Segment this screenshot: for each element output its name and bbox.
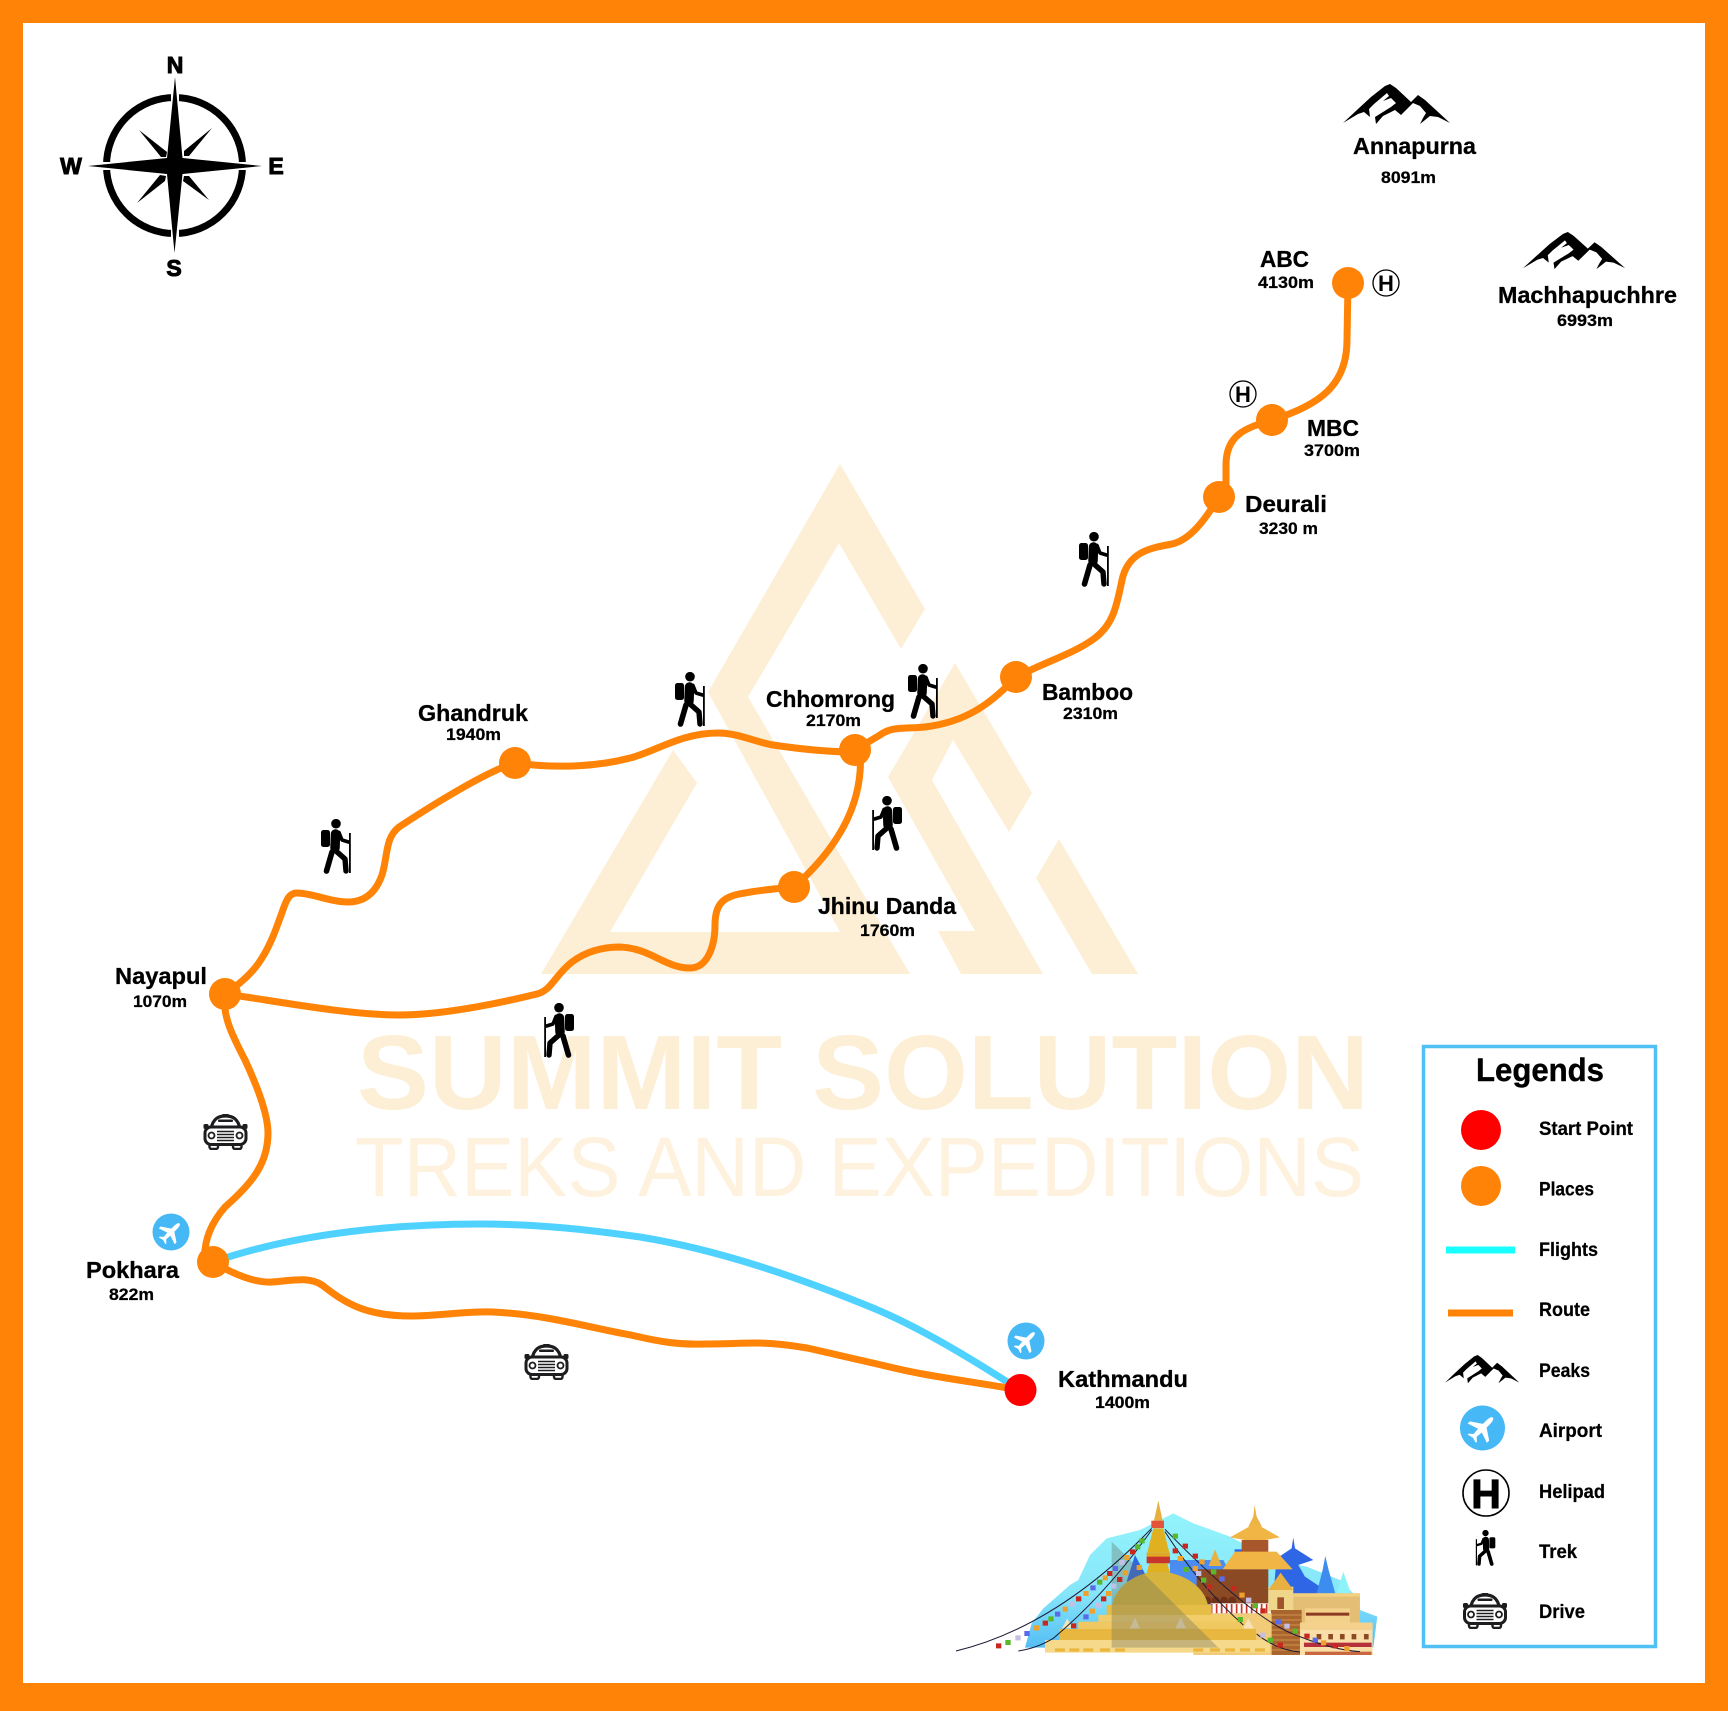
legend item: places: Places <box>1539 1178 1594 1200</box>
legend title: Legends <box>1476 1052 1604 1088</box>
peak: Machhapuchhre <box>1498 232 1677 330</box>
peak: Machhapuchhre: Machhapuchhre <box>1498 282 1677 308</box>
watermark logo and company name <box>355 464 1369 1214</box>
peak: Annapurna <box>1343 84 1476 187</box>
icon: helipad at ABC <box>1373 270 1399 296</box>
peak: Annapurna: 8091m <box>1381 169 1436 187</box>
icon: trekker near Deurali <box>1079 532 1109 586</box>
icon: trekker on lower route <box>544 1003 574 1057</box>
icon: trekker near Nayapul <box>321 819 351 873</box>
label: ABC: 4130m <box>1258 274 1314 292</box>
legend item: trek <box>1476 1530 1577 1565</box>
label: Jhinu Danda <box>818 893 956 940</box>
label: Bamboo: 2310m <box>1063 705 1118 723</box>
legend item: helipad <box>1463 1470 1605 1517</box>
label: MBC <box>1304 415 1360 460</box>
place nodes <box>197 267 1364 1278</box>
label: Ghandruk: Ghandruk <box>418 700 528 726</box>
icon: car Nayapul to Pokhara <box>204 1114 248 1149</box>
compass rose: W <box>60 153 82 179</box>
watermark logo and company name: SUMMIT SOLUTION <box>357 1014 1369 1132</box>
label: Pokhara: 822m <box>109 1286 154 1304</box>
legend item: peaks <box>1445 1355 1590 1383</box>
label: Chhomrong: 2170m <box>806 712 861 730</box>
legend item: drive <box>1463 1593 1585 1628</box>
panel: legend <box>1424 1046 1656 1646</box>
label: Chhomrong: Chhomrong <box>766 686 895 712</box>
compass rose: E <box>268 153 284 179</box>
legend item: start point <box>1461 1110 1633 1150</box>
label: Ghandruk <box>418 700 528 744</box>
compass rose <box>60 52 284 281</box>
start point: Kathmandu <box>1004 1374 1036 1406</box>
label: Kathmandu: Kathmandu <box>1058 1366 1188 1392</box>
legend item: route <box>1448 1299 1590 1321</box>
legend item: helipad: H <box>1471 1471 1501 1517</box>
icon: helipad at ABC: H <box>1378 271 1394 296</box>
legend item: airport <box>1460 1406 1602 1450</box>
label: Ghandruk: 1940m <box>446 726 501 744</box>
illustration: Kathmandu temples and stupa <box>956 1501 1377 1655</box>
label: Jhinu Danda: 1760m <box>860 922 915 940</box>
flight path Pokhara to Kathmandu <box>213 1224 1020 1390</box>
label: ABC <box>1258 246 1314 292</box>
icon: helipad at MBC: H <box>1235 382 1251 407</box>
label: MBC: MBC <box>1307 415 1359 441</box>
label: Nayapul: 1070m <box>133 993 187 1011</box>
legend item: peaks: Peaks <box>1539 1360 1590 1382</box>
watermark logo and company name: TREKS AND EXPEDITIONS <box>355 1120 1364 1214</box>
label: Jhinu Danda: Jhinu Danda <box>818 893 956 919</box>
compass rose: S <box>166 255 182 281</box>
label: MBC: 3700m <box>1304 442 1360 460</box>
icon: Pokhara airport <box>152 1214 190 1250</box>
label: Kathmandu <box>1058 1366 1188 1412</box>
legend item: trek: Trek <box>1539 1541 1577 1563</box>
peak: Machhapuchhre: 6993m <box>1557 312 1613 330</box>
label: Pokhara: Pokhara <box>86 1257 179 1283</box>
label: Nayapul: Nayapul <box>115 963 207 989</box>
legend item: start point: Start Point <box>1539 1118 1633 1140</box>
label: Chhomrong <box>766 686 895 730</box>
orange trek and drive routes <box>205 283 1348 1390</box>
legend item: places <box>1461 1166 1594 1206</box>
legend item: helipad: Helipad <box>1539 1481 1605 1503</box>
legend item: flights: Flights <box>1539 1239 1598 1261</box>
icon: trekker near Ghandruk <box>675 672 705 726</box>
icon: car Pokhara to Kathmandu <box>524 1344 568 1379</box>
legend item: route: Route <box>1539 1299 1590 1321</box>
label: Deurali: Deurali <box>1245 491 1327 517</box>
icon: trekker near Chhomrong <box>908 664 938 718</box>
compass rose: N <box>167 52 183 78</box>
legend item: drive: Drive <box>1539 1601 1585 1623</box>
legend item: airport: Airport <box>1539 1420 1602 1442</box>
label: Kathmandu: 1400m <box>1095 1394 1150 1412</box>
peak: Annapurna: Annapurna <box>1353 133 1476 159</box>
label: Deurali <box>1245 491 1327 538</box>
icon: trekker near Jhinu Danda <box>872 796 902 850</box>
label: Bamboo: Bamboo <box>1042 679 1133 705</box>
label: Bamboo <box>1042 679 1133 723</box>
label: ABC: ABC <box>1260 246 1309 272</box>
legend item: flights <box>1446 1239 1598 1261</box>
label: Nayapul <box>115 963 207 1011</box>
label: Pokhara <box>86 1257 179 1304</box>
icon: helipad at MBC <box>1230 381 1256 407</box>
icon: Kathmandu airport <box>1008 1322 1044 1360</box>
label: Deurali: 3230 m <box>1259 520 1318 538</box>
